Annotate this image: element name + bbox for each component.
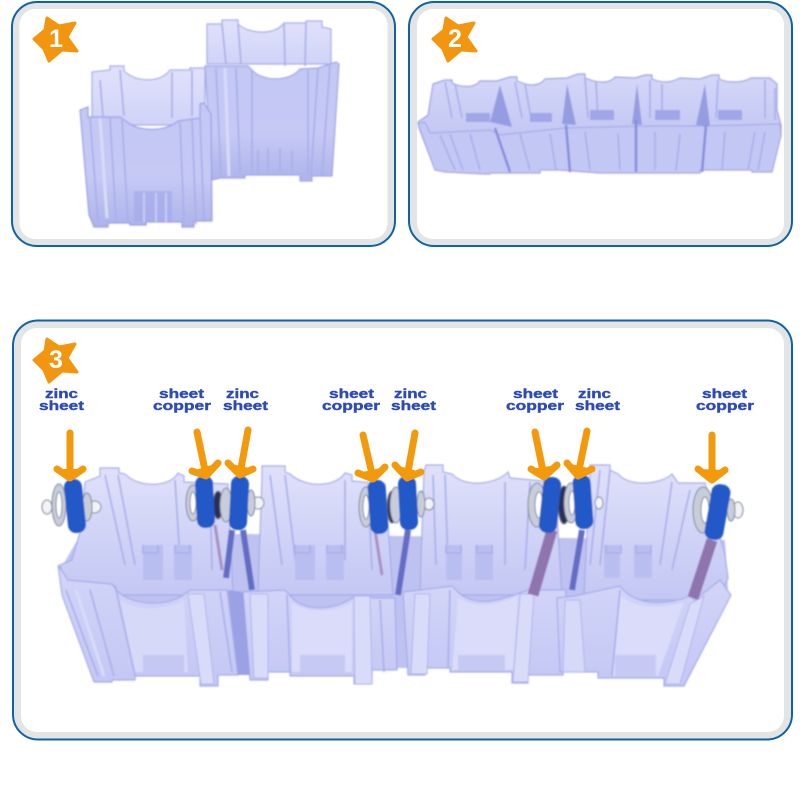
panel: step 1 bbox=[12, 2, 395, 246]
star badge 2 bbox=[433, 18, 476, 61]
arrow: sheet copper 2 bbox=[358, 435, 385, 479]
electrode discs and bolts bbox=[42, 474, 743, 541]
label: sheet copper 3 bbox=[506, 386, 564, 413]
star badge 1 bbox=[34, 18, 77, 61]
panel: step 3 bbox=[13, 320, 792, 740]
label: sheet copper 4 bbox=[696, 386, 754, 413]
cell 1 bbox=[58, 468, 238, 686]
label: sheet copper 3: copper bbox=[506, 398, 564, 413]
electrode strips bbox=[215, 525, 712, 598]
label: zinc sheet 1: sheet bbox=[39, 398, 85, 413]
label: sheet copper 1 bbox=[153, 386, 211, 413]
star badge 3 bbox=[34, 339, 77, 382]
label: sheet copper 3: sheet bbox=[513, 386, 559, 401]
label: sheet copper 2: copper bbox=[322, 398, 380, 413]
arrow: zinc sheet 2 bbox=[228, 430, 253, 475]
container row: five joined cells bbox=[418, 74, 781, 174]
panel frame 3 bbox=[13, 320, 792, 740]
label: sheet copper 1: copper bbox=[153, 398, 211, 413]
label: sheet copper 2: sheet bbox=[329, 386, 375, 401]
arrow: zinc sheet 3 bbox=[395, 433, 421, 478]
arrow: zinc sheet 4 bbox=[567, 431, 592, 476]
arrow: zinc sheet 1 bbox=[57, 433, 83, 478]
label: zinc sheet 2 bbox=[223, 386, 269, 413]
arrow: sheet copper 1 bbox=[192, 432, 218, 476]
cell 4 bbox=[557, 465, 731, 686]
label: sheet copper 2 bbox=[322, 386, 380, 413]
star badge 3: 3 bbox=[49, 346, 63, 374]
label: zinc sheet 2: sheet bbox=[223, 398, 269, 413]
label: zinc sheet 4 bbox=[575, 386, 621, 413]
arrow: sheet copper 3 bbox=[531, 432, 557, 477]
battery row: four cells with electrodes bbox=[42, 465, 743, 686]
label: zinc sheet 1 bbox=[39, 386, 85, 413]
label: sheet copper 4: copper bbox=[696, 398, 754, 413]
cell 3 bbox=[403, 465, 566, 683]
label: zinc sheet 1: zinc bbox=[45, 386, 78, 401]
label: zinc sheet 3 bbox=[391, 386, 437, 413]
label: zinc sheet 3: zinc bbox=[394, 386, 427, 401]
label: sheet copper 1: sheet bbox=[159, 386, 205, 401]
star badge 2: 2 bbox=[448, 25, 462, 53]
panel frame 2 bbox=[409, 2, 792, 246]
star badge 1: 1 bbox=[49, 25, 63, 53]
container pair: two separate cells bbox=[80, 20, 339, 227]
label: zinc sheet 3: sheet bbox=[391, 398, 437, 413]
label: zinc sheet 2: zinc bbox=[226, 386, 259, 401]
arrow: sheet copper 4 bbox=[698, 435, 725, 480]
panel frame 1 bbox=[12, 2, 395, 246]
panel: step 2 bbox=[409, 2, 792, 246]
cell 2 bbox=[228, 466, 397, 684]
label: zinc sheet 4: zinc bbox=[578, 386, 611, 401]
label: zinc sheet 4: sheet bbox=[575, 398, 621, 413]
label: sheet copper 4: sheet bbox=[702, 386, 748, 401]
row backing behind the cells bbox=[60, 532, 728, 668]
